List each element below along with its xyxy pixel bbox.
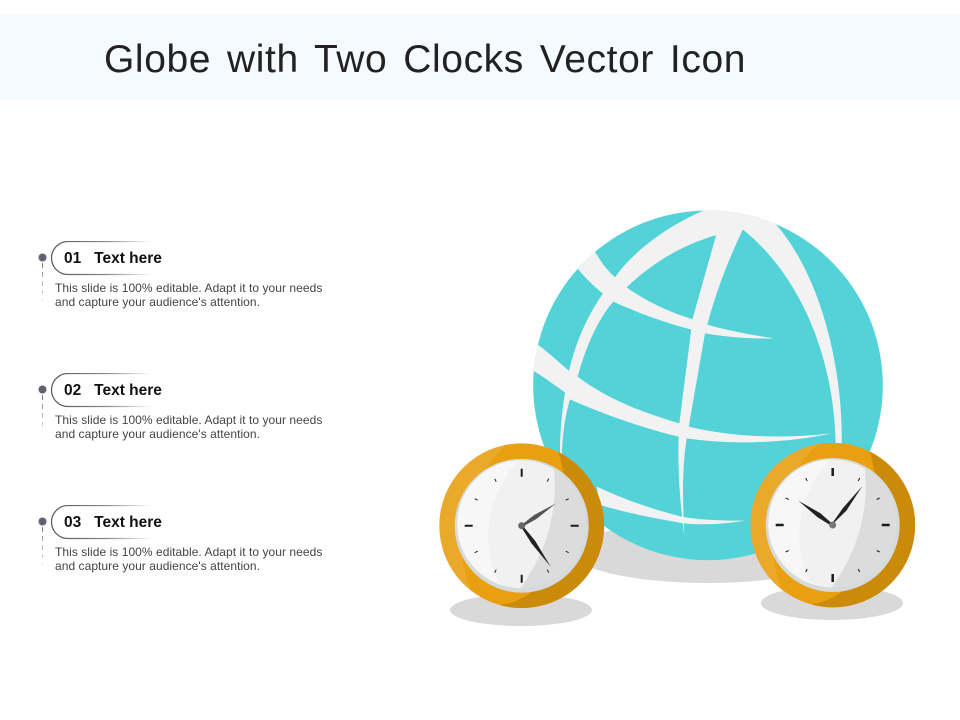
- item 01: [38, 241, 322, 309]
- item 01 description: [55, 281, 322, 309]
- header band: [0, 14, 960, 100]
- globe meridian arch: [560, 208, 842, 460]
- clock 2 hands: [798, 486, 862, 528]
- item 02 description: [55, 413, 322, 441]
- item 03: [38, 505, 322, 573]
- clock 1 tick marks: [465, 469, 579, 583]
- item 02 description: This slide is 100% editable. Adapt it to your needs: [55, 413, 322, 427]
- item 03 description: [55, 545, 322, 573]
- globe upper latitude band: [578, 252, 773, 338]
- icon: globe: [518, 208, 883, 560]
- item 01 description: This slide is 100% editable. Adapt it to your needs: [55, 281, 322, 295]
- item 02 description: and capture your audience's attention.: [55, 427, 260, 441]
- illustration: globe and clocks: [439, 210, 916, 626]
- clock 1 hands: [518, 503, 556, 567]
- item 02 heading: 02 Text here: [64, 382, 162, 399]
- clock 2 tick marks: [776, 468, 890, 582]
- globe shadow: [573, 521, 843, 583]
- title: Globe with Two Clocks Vector Icon: [104, 38, 746, 81]
- globe centre meridian: [678, 228, 743, 536]
- item 03 description: and capture your audience's attention.: [55, 559, 260, 573]
- item 03 description: This slide is 100% editable. Adapt it to your needs: [55, 545, 322, 559]
- item 02: [38, 373, 322, 441]
- clock 2 shadow: [761, 586, 903, 620]
- globe lower latitude band: [597, 487, 745, 524]
- icon: left clock: [439, 443, 604, 608]
- item 03 heading: 03 Text here: [64, 514, 162, 531]
- globe middle latitude band: [534, 344, 832, 442]
- icon: right clock: [750, 443, 915, 607]
- item 01 heading: 01 Text here: [64, 250, 162, 267]
- item 01 description: and capture your audience's attention.: [55, 295, 260, 309]
- clock 1 shadow: [450, 594, 592, 626]
